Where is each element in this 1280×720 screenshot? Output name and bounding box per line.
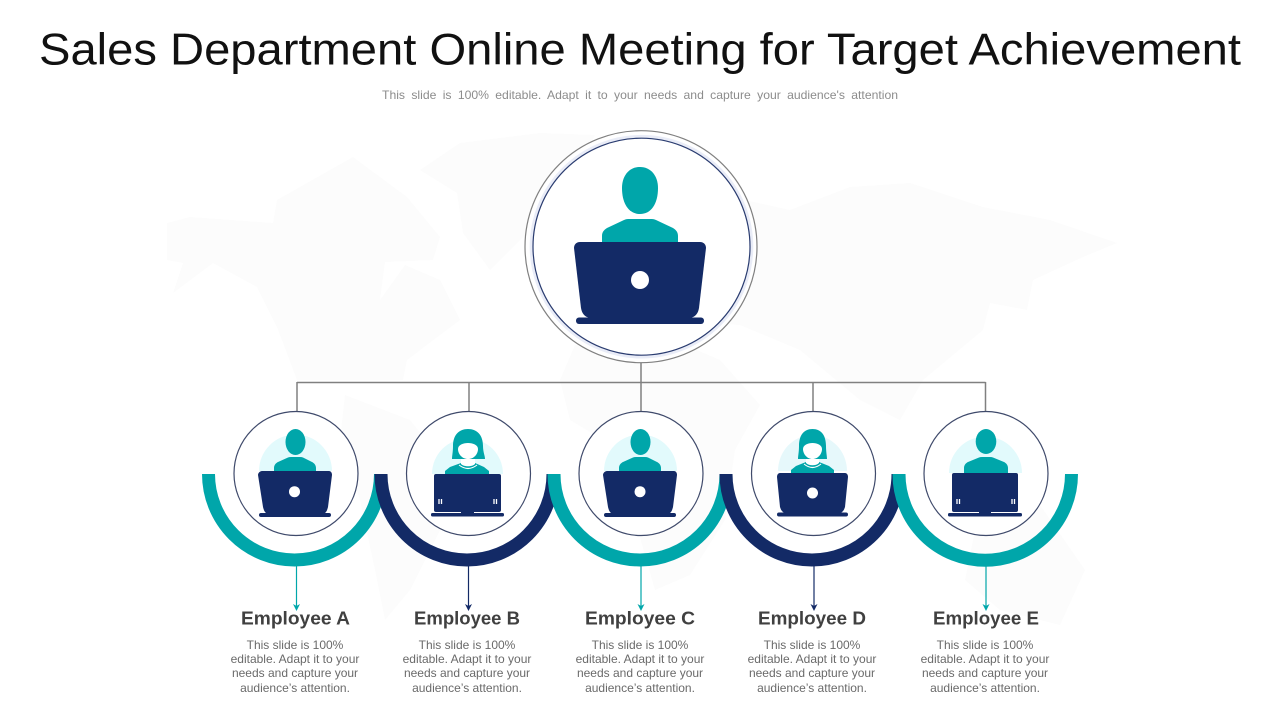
employee A text: Employee A <box>241 608 350 628</box>
employee A text <box>231 608 359 695</box>
arrow B <box>465 566 472 611</box>
employee B text: editable. Adapt it to your <box>403 652 531 666</box>
background world map <box>167 133 1117 625</box>
arrow C <box>638 566 644 611</box>
central presenter icon <box>525 131 757 363</box>
employee B text <box>403 608 531 695</box>
employee D text: needs and capture your <box>749 666 875 680</box>
employee D text: This slide is 100% <box>764 638 861 652</box>
central person <box>602 167 678 243</box>
employee A text: audience’s attention. <box>240 681 350 695</box>
employee E text: editable. Adapt it to your <box>921 652 1049 666</box>
employee E text: needs and capture your <box>922 666 1048 680</box>
employee B text: Employee B <box>414 608 520 628</box>
employee E text: This slide is 100% <box>937 638 1034 652</box>
employee B text: needs and capture your <box>404 666 530 680</box>
employee C text: This slide is 100% <box>592 638 689 652</box>
employee A icon <box>234 412 358 536</box>
employee D icon <box>752 412 876 536</box>
employee C text: needs and capture your <box>577 666 703 680</box>
title: Sales Department Online Meeting for Target Achievement <box>39 26 1242 74</box>
central double ring <box>525 131 757 363</box>
employee D text: Employee D <box>758 608 866 628</box>
employee D text: audience’s attention. <box>757 681 867 695</box>
employee C text: editable. Adapt it to your <box>576 652 704 666</box>
employee C text: Employee C <box>585 608 695 628</box>
employee A text: editable. Adapt it to your <box>231 652 359 666</box>
employee E text: audience’s attention. <box>930 681 1040 695</box>
employee A text: needs and capture your <box>232 666 358 680</box>
org chart connector lines <box>297 362 986 412</box>
employee E text <box>921 608 1049 695</box>
employee D text: editable. Adapt it to your <box>748 652 876 666</box>
employee C text: audience’s attention. <box>585 681 695 695</box>
subtitle: This slide is 100% editable. Adapt it to your needs and capture your audience's attention <box>382 88 898 102</box>
employee A text: This slide is 100% <box>247 638 344 652</box>
arrow D <box>810 566 818 611</box>
employee B text: This slide is 100% <box>419 638 516 652</box>
arrow A <box>293 566 300 611</box>
employee E text: Employee E <box>933 608 1039 628</box>
employee D text <box>748 608 876 695</box>
semicircle arcs <box>208 474 1072 560</box>
employee B icon <box>406 412 530 536</box>
employee B text: audience’s attention. <box>412 681 522 695</box>
employee C icon <box>579 412 703 536</box>
employee C text <box>576 608 704 695</box>
central laptop <box>574 242 706 324</box>
arrow E <box>982 566 990 611</box>
employee E icon <box>924 412 1048 536</box>
